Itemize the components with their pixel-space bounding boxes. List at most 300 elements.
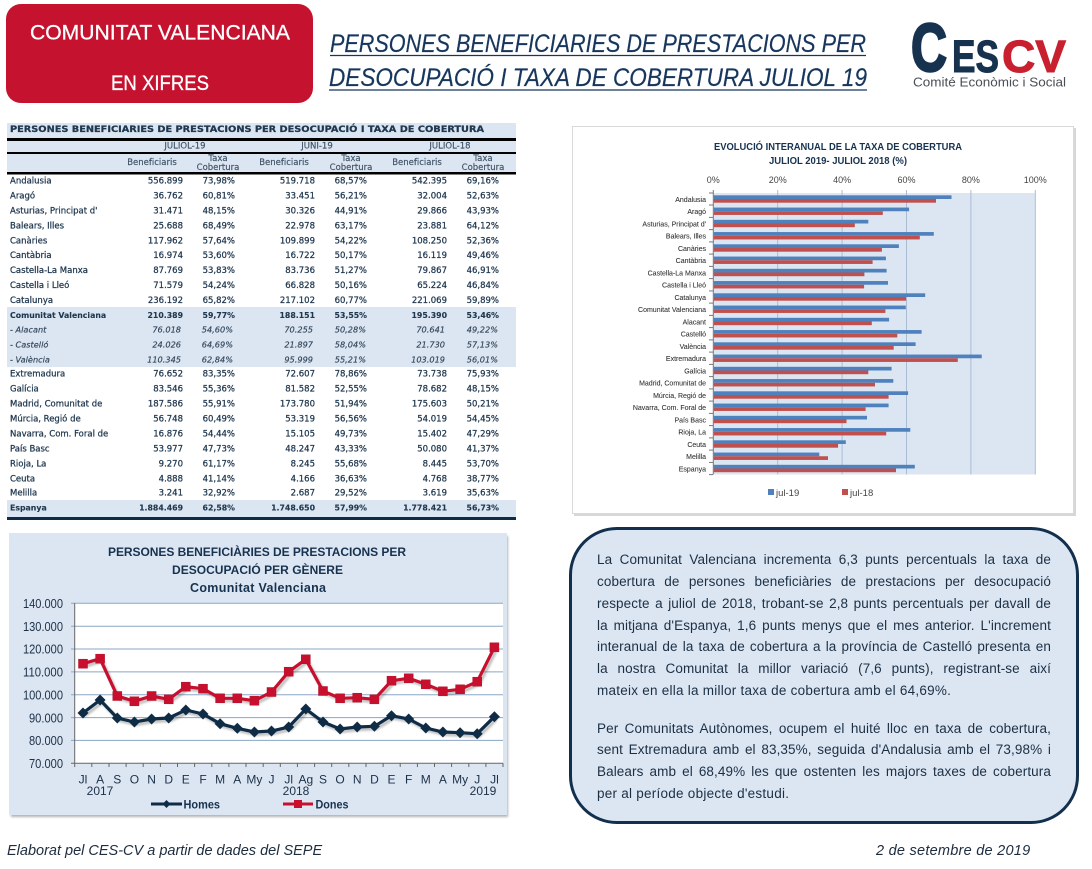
row: Andalusia: 542.395 <box>412 176 447 186</box>
row: País Basc: 53.977 <box>153 444 183 454</box>
row: Aragó: 56,21% <box>335 192 367 202</box>
x axis labels: O <box>335 772 345 786</box>
row: Canàries: Canàries <box>10 236 48 246</box>
logo: CES CV: ES <box>952 31 999 82</box>
row: Castella i Lleó: 66.828 <box>285 281 315 291</box>
row: Comunitat Valenciana: 195.390 <box>411 311 448 320</box>
bar chart category labels: Rioja, La <box>678 430 706 436</box>
y axis labels: 130.000 <box>23 619 63 634</box>
row: Castella i Lleó: 54,24% <box>203 281 235 291</box>
bar chart category labels: Balears, Illes <box>666 234 706 240</box>
top axis labels: 60% <box>897 175 916 185</box>
row: Asturias: 44,91% <box>335 206 367 216</box>
row: Galícia: 83.546 <box>153 384 183 394</box>
bar chart legend <box>768 488 873 499</box>
table title: PERSONES BENEFICIARIES DE PRESTACIONS PER DESOCUPACIÓ I TAXA DE COBERTURA <box>10 123 484 135</box>
banner: Comunitat Valenciana en xifres: EN XIFRES <box>111 72 209 95</box>
bar chart category labels: Galícia <box>684 368 706 376</box>
bar chart category labels: Extremadura <box>666 356 706 363</box>
x axis labels: D <box>370 772 379 786</box>
bar chart category labels: Espanya <box>679 466 706 474</box>
x axis labels: F <box>199 772 207 786</box>
row: Ceuta: 4.768 <box>423 474 447 484</box>
banner: Comunitat Valenciana en xifres: COMUNITAT VALENCIANA <box>30 22 290 44</box>
row: Asturias: 43,93% <box>467 206 499 216</box>
data table <box>7 123 516 520</box>
row: Castelló: - Castelló <box>10 340 48 350</box>
row: Navarra: Navarra, Com. Foral de <box>10 430 108 440</box>
panel: line chart per gènere <box>9 533 508 817</box>
row: Canàries: 109.899 <box>280 236 315 246</box>
row: Ceuta: 38,77% <box>467 474 499 484</box>
row: Navarra: 16.876 <box>153 430 183 440</box>
line chart title: Comunitat Valenciana <box>190 581 327 595</box>
plot background <box>713 193 1035 474</box>
row: Galícia: 52,55% <box>335 384 367 394</box>
row: Espanya: Espanya <box>10 504 47 512</box>
row: Castella i Lleó: 65.224 <box>417 281 447 291</box>
bar chart category labels: Catalunya <box>674 295 706 302</box>
row: Andalusia: 519.718 <box>280 176 315 186</box>
row: Cantàbria: Cantàbria <box>10 251 52 261</box>
table column headers: Cobertura <box>197 163 239 173</box>
paragraph 2: per al període objecte d'estudi. <box>597 786 789 800</box>
row: Cantàbria: 49,46% <box>467 251 499 261</box>
bar chart category labels: Aragó <box>687 209 706 216</box>
row: Castella i Lleó: 50,16% <box>335 281 367 291</box>
bar chart title <box>714 140 962 167</box>
row: Aragó: 32.004 <box>417 192 447 202</box>
row: Balears: 63,17% <box>335 222 367 232</box>
line chart legend: Dones <box>316 798 349 812</box>
row: Canàries: 52,36% <box>467 236 499 246</box>
row: Alacant: 70.641 <box>416 324 445 334</box>
row: Melilla: 35,63% <box>467 488 499 498</box>
x axis labels: J <box>474 772 480 786</box>
row: País Basc: 41,37% <box>467 444 499 454</box>
top axis labels: 100% <box>1024 175 1047 185</box>
row: Espanya <box>10 504 499 512</box>
bar chart category labels: País Basc <box>674 418 706 424</box>
line chart title: PERSONES BENEFICIÀRIES DE PRESTACIONS PER <box>108 544 406 559</box>
row: Castella i Lleó: 46,84% <box>467 281 499 291</box>
row: Andalusia: 68,57% <box>335 176 367 186</box>
row: Cantàbria: 16.119 <box>417 251 447 261</box>
row: Espanya: 1.884.469 <box>139 504 183 512</box>
x axis labels: S <box>113 772 121 786</box>
bar chart category labels: Melilla <box>686 454 706 461</box>
y axis labels: 70.000 <box>29 756 63 771</box>
line chart title: DESOCUPACIÓ PER GÈNERE <box>172 562 343 577</box>
row: València: 103.019 <box>411 354 445 364</box>
row: Alacant: 76.018 <box>152 324 181 334</box>
row: Asturias <box>10 206 499 216</box>
row: València: 55,21% <box>335 354 366 364</box>
paragraph 1: la nostra Comunitat la millor variació (7,6 punts), registrant-se així <box>597 661 1051 676</box>
row: Balears: 22.978 <box>285 222 315 232</box>
bar chart category labels: Navarra, Com. Foral de <box>633 405 706 412</box>
row: Navarra: 15.402 <box>417 430 447 440</box>
table column headers: Taxa <box>340 154 361 164</box>
row: Castella-La Manxa: 46,91% <box>467 266 499 276</box>
bar chart category labels: Madrid, Comunitat de <box>639 380 706 388</box>
row: Alacant: 70.255 <box>284 324 313 334</box>
row: Espanya: 56,73% <box>467 504 499 512</box>
top axis labels: 20% <box>769 175 787 185</box>
row: Ceuta <box>10 474 499 484</box>
bar chart title: EVOLUCIÓ INTERANUAL DE LA TAXA DE COBERTURA <box>714 140 962 153</box>
row: Espanya: 1.748.650 <box>271 504 316 512</box>
row: Asturias: 48,15% <box>203 206 235 216</box>
row: Canàries: 57,64% <box>203 236 235 246</box>
row: Melilla: 3.619 <box>423 488 447 498</box>
row: Balears: 64,12% <box>467 222 499 232</box>
row: Castella-La Manxa: 51,27% <box>335 266 367 276</box>
bar chart category labels: Asturias, Principat d' <box>642 222 706 228</box>
row: Madrid: 51,94% <box>335 400 367 410</box>
row: Rioja: 53,70% <box>467 460 499 470</box>
x axis labels: M <box>215 772 225 786</box>
row: Cantàbria: 16.722 <box>285 251 315 261</box>
row: Ceuta: 41,14% <box>203 474 235 484</box>
row: Alacant: 50,28% <box>335 324 366 334</box>
paragraph 1: la mitjana d'Espanya, 1,6 punts menys que el mes anterior. L'increment <box>597 618 1051 633</box>
bar chart category labels: Canàries <box>678 246 706 253</box>
row: Catalunya: 236.192 <box>148 296 183 306</box>
row: Balears: 68,49% <box>203 222 235 232</box>
row: País Basc <box>10 444 499 454</box>
row: País Basc: 43,33% <box>335 444 367 454</box>
bar chart category labels: Múrcia, Regió de <box>653 393 706 400</box>
row: Extremadura <box>10 370 499 380</box>
row: Comunitat Valenciana: 188.151 <box>279 311 315 320</box>
line chart legend: Homes <box>184 798 220 812</box>
table column headers: Beneficiaris <box>392 158 442 168</box>
top axis labels: 40% <box>833 175 851 185</box>
x axis labels: A <box>96 772 104 786</box>
row: Madrid: 55,91% <box>203 400 235 410</box>
row: Canàries: 108.250 <box>412 236 447 246</box>
row: Navarra: 15.105 <box>285 430 315 440</box>
row: Rioja: 55,68% <box>335 460 367 470</box>
row: Galícia: 48,15% <box>467 384 499 394</box>
y axis labels: 80.000 <box>29 733 63 748</box>
text box: commentary <box>569 527 1079 824</box>
row: Castella i Lleó: 71.579 <box>153 281 183 291</box>
row: Aragó: Aragó <box>10 190 35 202</box>
row: Galícia: Galícia <box>10 384 39 394</box>
plot area <box>75 603 503 763</box>
row: Ceuta: 4.166 <box>291 474 315 484</box>
x axis labels: 2019 <box>470 784 497 798</box>
row: València: - València <box>10 354 50 364</box>
y axis labels <box>23 596 63 771</box>
row: Comunitat Valenciana: 210.389 <box>147 311 183 320</box>
line shadows <box>85 650 496 736</box>
top axis labels <box>707 175 1047 185</box>
panel: bar chart evolució interanual <box>572 126 1076 516</box>
bar chart category labels: Alacant <box>683 320 706 326</box>
row: Espanya: 1.778.421 <box>403 504 447 512</box>
row: Melilla: 3.241 <box>159 488 183 498</box>
footer: source: Elaborat pel CES-CV a partir de dades del SEPE <box>7 843 322 859</box>
table column headers: JULIOL-18 <box>428 142 471 152</box>
row: Extremadura: 75,93% <box>467 370 499 380</box>
row: Castelló: 21.897 <box>284 340 314 350</box>
row: Galícia <box>10 384 499 394</box>
logo: CES CV: CV <box>1002 31 1066 82</box>
row: Múrcia: 56.748 <box>153 414 183 424</box>
x axis labels: My <box>246 772 262 786</box>
row: País Basc: 47,73% <box>203 444 235 454</box>
row: Galícia: 81.582 <box>285 384 315 394</box>
paragraph 1: cobertura de persones beneficiàries de prestacions per desocupació <box>597 574 1051 589</box>
x axis labels: O <box>130 772 139 786</box>
bar chart legend: jul-18 <box>849 488 873 499</box>
row: Galícia: 55,36% <box>203 384 235 394</box>
row: Castelló: 64,69% <box>202 340 233 350</box>
row: Balears: 25.688 <box>153 222 183 232</box>
row: València: 110.345 <box>147 354 181 364</box>
row: València: 62,84% <box>202 354 233 364</box>
row: Balears: Balears, Illes <box>10 222 65 232</box>
x axis labels: M <box>421 772 431 786</box>
row: Asturias: 31.471 <box>153 206 183 216</box>
x axis labels: J <box>268 772 274 786</box>
x axis labels: Jl <box>284 772 293 786</box>
bar chart category labels: Andalusia <box>675 197 706 204</box>
row: Asturias: 30.326 <box>285 206 315 216</box>
row: Espanya: 62,58% <box>203 504 235 512</box>
row: Cantàbria: 50,17% <box>335 251 367 261</box>
row: Andalusia <box>10 176 499 186</box>
row: Andalusia: 69,16% <box>467 176 499 186</box>
x axis labels: S <box>319 772 327 786</box>
row: Catalunya: 217.102 <box>280 296 315 306</box>
bars: jul-19 <box>714 195 982 469</box>
row: Balears: 23.881 <box>417 222 447 232</box>
x axis labels: N <box>147 772 156 786</box>
row: Rioja: Rioja, La <box>10 460 46 470</box>
row: Melilla: Melilla <box>10 488 37 498</box>
table column headers: JULIOL-19 <box>163 142 206 152</box>
row: Galícia: 78.682 <box>417 384 447 394</box>
row: Aragó <box>10 190 499 202</box>
row: Navarra: 47,29% <box>467 430 499 440</box>
row: Ceuta: 36,63% <box>335 474 367 484</box>
top axis labels: 80% <box>962 175 980 185</box>
row: Catalunya: 221.069 <box>412 296 447 306</box>
x axis labels: Jl <box>490 772 499 786</box>
row: Cantàbria: 53,60% <box>203 251 235 261</box>
row: València: 95.999 <box>284 354 313 364</box>
row: Canàries: 54,22% <box>335 236 367 246</box>
row: Andalusia: 73,98% <box>203 176 235 186</box>
row: Castelló: 24.026 <box>152 340 181 350</box>
row: Andalusia: Andalusia <box>10 176 52 186</box>
row: Catalunya: Catalunya <box>10 296 53 306</box>
row: Cantàbria <box>10 251 499 261</box>
row: Comunitat Valenciana: 53,55% <box>335 311 367 320</box>
row: Castella-La Manxa: Castella-La Manxa <box>10 266 88 276</box>
x axis labels: 2018 <box>283 784 310 798</box>
row: Melilla: 32,92% <box>203 488 235 498</box>
bar chart legend: jul-19 <box>775 488 799 499</box>
row: Navarra <box>10 430 499 440</box>
row: Múrcia: 60,49% <box>203 414 235 424</box>
row: Rioja: 9.270 <box>159 460 183 470</box>
x axis labels: Jl <box>79 772 87 786</box>
row: Extremadura: Extremadura <box>10 370 65 380</box>
y axis labels: 140.000 <box>23 596 63 611</box>
x axis labels: F <box>405 772 412 786</box>
bar chart category labels: València <box>680 344 706 351</box>
x axis labels: N <box>353 772 362 786</box>
paragraph 1: respecte a juliol de 2018, trobant-se 2,8 punts percentuals per davall de <box>597 596 1051 610</box>
row: Canàries <box>10 236 499 246</box>
row: Alacant <box>10 324 498 334</box>
main title: PERSONES BENEFICIARIES DE PRESTACIONS PER <box>330 30 866 58</box>
row: Madrid: 187.586 <box>148 400 183 410</box>
row: Melilla <box>10 488 499 498</box>
row: Alacant: - Alacant <box>10 324 47 334</box>
row: Castella-La Manxa: 79.867 <box>417 266 447 276</box>
row: Canàries: 117.962 <box>148 236 183 246</box>
row: Madrid: 173.780 <box>280 400 315 410</box>
row: Castella-La Manxa <box>10 266 499 276</box>
x axis labels: E <box>387 772 396 786</box>
paragraph 2: Per Comunitats Autònomes, ocupem el huité lloc en taxa de cobertura, <box>597 720 1051 736</box>
row: Múrcia: 56,56% <box>335 414 367 424</box>
row: Madrid: Madrid, Comunitat de <box>10 400 102 410</box>
bar chart category labels: Cantàbria <box>676 258 706 265</box>
row: Comunitat Valenciana: Comunitat Valenciana <box>10 311 106 320</box>
top axis labels: 0% <box>707 175 720 185</box>
row: Madrid <box>10 400 499 410</box>
row: Rioja: 8.445 <box>423 460 447 470</box>
row: Balears <box>10 222 499 232</box>
row: Catalunya: 65,82% <box>203 296 235 306</box>
table column headers: Beneficiaris <box>127 158 177 168</box>
row: Alacant: 49,22% <box>467 324 498 334</box>
x axis labels: D <box>164 772 173 786</box>
footer: date: 2 de setembre de 2019 <box>876 843 1030 859</box>
table column headers: Taxa <box>472 154 493 164</box>
x axis labels: A <box>233 772 241 786</box>
row: Extremadura: 76.652 <box>153 370 183 380</box>
line series: Dones <box>83 647 494 701</box>
bar chart category labels: Castelló <box>681 332 706 338</box>
row: Comunitat Valenciana: 59,77% <box>203 311 235 320</box>
row: Cantàbria: 16.974 <box>153 251 183 261</box>
bar chart category labels: Castella-La Manxa <box>648 270 706 278</box>
logo: CES CV: C <box>911 10 947 86</box>
x axis labels: My <box>452 772 468 786</box>
row: Madrid: 50,21% <box>467 400 499 410</box>
row: Múrcia: 54,45% <box>467 414 499 424</box>
row: Rioja: 8.245 <box>291 460 315 470</box>
row: Catalunya: 59,89% <box>467 296 499 306</box>
row: Extremadura: 73.738 <box>417 370 447 380</box>
row: Melilla: 29,52% <box>335 488 367 498</box>
row: Alacant: 54,60% <box>202 324 233 334</box>
row: Navarra: 49,73% <box>335 430 367 440</box>
row: Espanya: 57,99% <box>335 504 367 512</box>
row: Múrcia: Múrcia, Regió de <box>10 414 81 424</box>
row: Extremadura: 78,86% <box>335 370 367 380</box>
row: País Basc: País Basc <box>10 444 50 454</box>
row: Castelló: 21.730 <box>416 340 445 350</box>
row: Asturias: Asturias, Principat d' <box>10 206 98 216</box>
row: Aragó: 33.451 <box>285 192 315 202</box>
bar chart category labels <box>633 197 706 474</box>
row: Múrcia <box>10 414 499 424</box>
row: Múrcia: 54.019 <box>417 414 447 424</box>
main title: DESOCUPACIÓ I TAXA DE COBERTURA JULIOL 19 <box>329 63 867 92</box>
row: Castella-La Manxa: 87.769 <box>153 266 183 276</box>
table column headers: Beneficiaris <box>259 158 309 168</box>
paragraph 1: mateix en ella la millor taxa de cobertura amb el 64,69%. <box>597 682 951 698</box>
row: Madrid: 175.603 <box>412 400 447 410</box>
paragraph 1: interanual de la taxa de cobertura a la província de Castelló presenta en <box>597 639 1051 654</box>
bar chart title: JULIOL 2019- JULIOL 2018 (%) <box>769 155 907 167</box>
row: Castelló <box>10 340 498 350</box>
row: Castella-La Manxa: 83.736 <box>285 266 315 276</box>
row: Extremadura: 83,35% <box>203 370 235 380</box>
paragraph 1: La Comunitat Valenciana incrementa 6,3 punts percentuals la taxa de <box>597 552 1051 567</box>
row: Múrcia: 53.319 <box>285 414 315 424</box>
table column headers: JUNI-19 <box>300 142 333 152</box>
y axis labels: 120.000 <box>23 642 63 657</box>
x axis labels: 2017 <box>87 784 114 798</box>
row: Rioja: 61,17% <box>203 460 235 470</box>
y axis labels: 110.000 <box>23 665 63 680</box>
row: Ceuta: Ceuta <box>10 474 35 484</box>
line series: Homes <box>83 700 494 734</box>
table column headers: Taxa <box>207 154 228 164</box>
y axis labels: 90.000 <box>29 710 63 725</box>
row: Andalusia: 556.899 <box>148 176 183 186</box>
row: Extremadura: 72.607 <box>285 370 315 380</box>
row: Navarra: 54,44% <box>203 430 235 440</box>
x axis labels <box>79 772 499 798</box>
row: País Basc: 48.247 <box>285 444 315 454</box>
banner: Comunitat Valenciana en xifres <box>6 4 313 103</box>
row: Comunitat Valenciana <box>10 311 499 320</box>
bar chart category labels: Ceuta <box>687 442 706 449</box>
row: Catalunya: 60,77% <box>335 296 367 306</box>
row: País Basc: 50.080 <box>417 444 447 454</box>
row: Castelló: 58,04% <box>335 340 366 350</box>
row: Rioja <box>10 460 499 470</box>
row: Melilla: 2.687 <box>291 488 315 498</box>
logo: CES CV <box>911 10 1066 90</box>
row: Aragó: 52,63% <box>467 192 499 202</box>
row: Aragó: 60,81% <box>203 192 235 202</box>
bar chart category labels: Castella i Lleó <box>662 282 706 290</box>
row: València: 56,01% <box>467 354 498 364</box>
line chart legend <box>151 798 349 812</box>
paragraph 2: sent Extremadura amb el 83,35%, seguida d'Andalusia amb el 73,98% i <box>597 742 1051 757</box>
table column headers <box>127 142 504 173</box>
x axis labels: E <box>182 772 190 786</box>
row: Castelló: 57,13% <box>467 340 498 350</box>
row: Castella-La Manxa: 53,83% <box>203 266 235 276</box>
table column headers: Cobertura <box>462 163 504 173</box>
row: Castella i Lleó <box>10 280 499 291</box>
x axis labels: A <box>439 772 447 786</box>
line chart title <box>108 544 406 595</box>
